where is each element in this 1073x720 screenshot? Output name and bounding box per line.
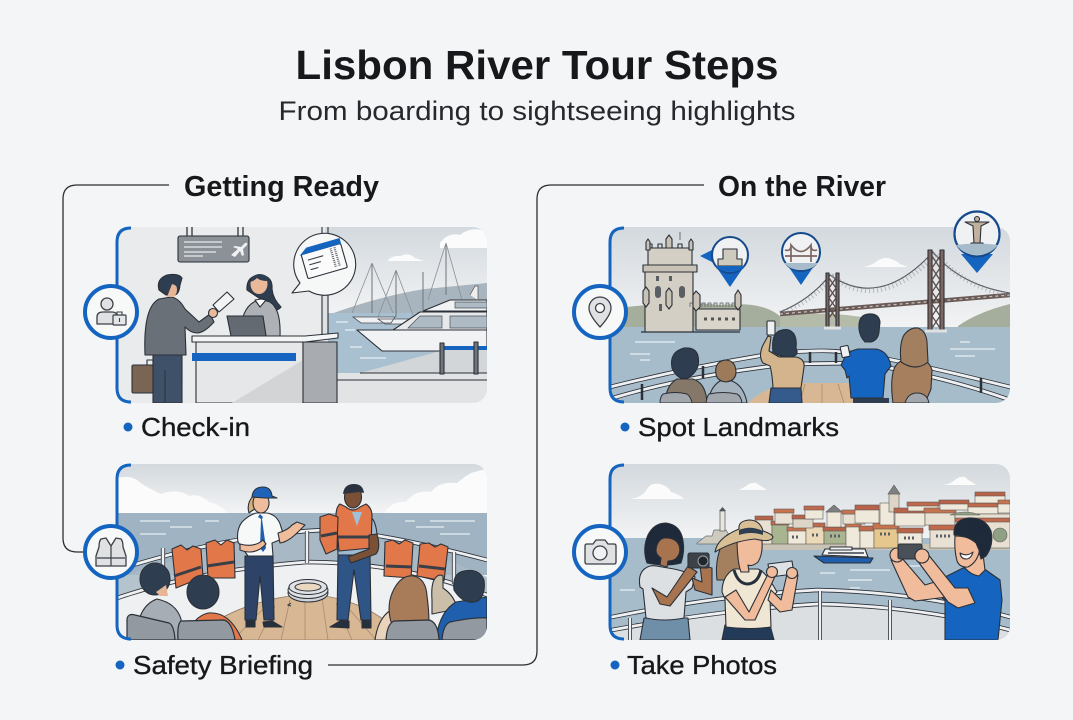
hanging sign <box>178 227 249 262</box>
bullet: Check-in <box>124 422 132 432</box>
rope coil <box>288 580 328 606</box>
panel: spot landmarks illustration <box>609 212 1010 403</box>
sailboats <box>352 243 462 324</box>
ferry <box>814 547 873 563</box>
panel: check-in illustration <box>116 227 487 403</box>
pole <box>322 295 328 337</box>
traveller <box>132 274 234 403</box>
agent <box>240 274 281 336</box>
city <box>755 485 1010 548</box>
dock <box>362 350 487 372</box>
label: Safety Briefing: Safety Briefing <box>133 650 313 680</box>
speech bubble with ticket <box>292 233 356 295</box>
railing <box>612 590 1010 617</box>
connector: Getting Ready bracket <box>63 185 169 552</box>
lower hull <box>612 606 1010 640</box>
railing <box>117 530 487 570</box>
bullet: Take Photos <box>610 660 620 670</box>
suspension bridge <box>780 250 1010 331</box>
Belem tower <box>641 232 741 332</box>
audience left <box>127 563 242 640</box>
subtitle: From boarding to sightseeing highlights <box>278 96 796 126</box>
heading: On the River: On the River <box>718 171 886 203</box>
deck <box>224 596 382 640</box>
woman with camera <box>639 523 712 640</box>
icon: life vest badge <box>85 526 137 578</box>
boat interior <box>204 562 384 575</box>
landmark pin: bridge <box>782 233 820 285</box>
label: Spot Landmarks: Spot Landmarks <box>638 412 839 442</box>
panel: take photos illustration <box>609 464 1010 640</box>
woman with hat and phone <box>715 520 798 640</box>
boat rail <box>610 351 1010 387</box>
instructor <box>238 487 305 627</box>
yacht <box>357 286 487 351</box>
icon: map pin badge <box>574 286 626 338</box>
title: Lisbon River Tour Steps <box>296 42 778 88</box>
hanging life jackets <box>172 540 448 588</box>
bullet: Spot Landmarks <box>620 422 630 432</box>
woman with long hair <box>892 328 932 403</box>
crew member with life vest <box>320 484 379 628</box>
landmark pin: tower <box>700 237 748 287</box>
icon: camera badge <box>574 526 626 578</box>
label: Check-in: Check-in <box>141 412 250 442</box>
heading: Getting Ready: Getting Ready <box>184 171 379 203</box>
icon: check-in badge <box>85 286 137 338</box>
deck <box>748 383 863 403</box>
man in blue <box>840 314 891 403</box>
woman with raised phone <box>760 321 804 403</box>
shore and lighthouse <box>697 507 1010 550</box>
seated guests <box>660 348 747 403</box>
bullet: Safety Briefing <box>116 660 124 670</box>
landmark pin: statue <box>954 212 1000 273</box>
laptop <box>227 316 266 336</box>
counter <box>192 333 338 403</box>
man taking photo <box>890 518 1002 640</box>
panel: safety briefing illustration <box>116 464 487 640</box>
connector: Safety Briefing to On the River <box>328 185 704 665</box>
label: Take Photos: Take Photos <box>627 650 777 680</box>
audience right <box>375 570 487 640</box>
